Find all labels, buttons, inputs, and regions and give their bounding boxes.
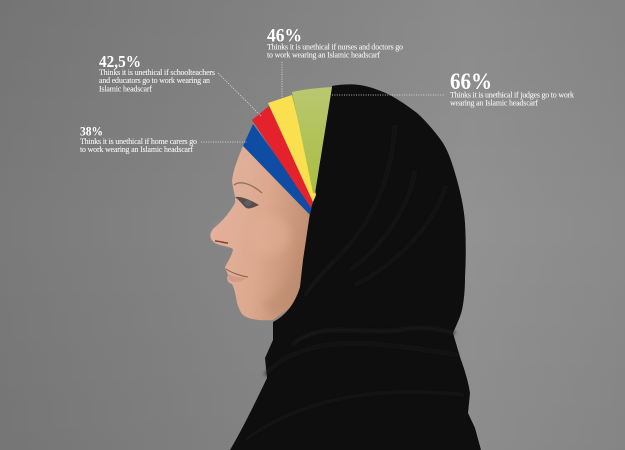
black hijab — [230, 84, 481, 450]
band: blue 38% — [243, 124, 312, 215]
stat: 42,5%: 42,5% — [99, 52, 141, 71]
stat: 38%: 38% — [80, 124, 103, 138]
hijab folds — [245, 125, 465, 440]
brow and eye — [234, 183, 262, 208]
stat: 46%: Thinks it is unethical if nurses and doctors go — [267, 42, 403, 52]
stat: 46% — [267, 26, 403, 60]
band: red 42.5% — [252, 106, 313, 208]
stat: 66% — [450, 69, 574, 108]
stat: 38% — [80, 124, 197, 154]
stat: 42,5% — [99, 52, 215, 94]
stat: 42,5%: Islamic headscarf — [99, 84, 152, 94]
band: green 66% — [292, 87, 332, 193]
stat: 66%: wearing an Islamic headscarf — [450, 98, 538, 108]
leader lines — [201, 62, 445, 142]
stat: 46%: 46% — [267, 26, 302, 46]
stat: 66%: Thinks it is unethical if judges go to work — [450, 90, 574, 100]
face shading — [216, 215, 305, 318]
illustration: woman in profile wearing headscarf — [210, 84, 481, 450]
stat: 42,5%: Thinks it is unethical if schoolteachers — [99, 68, 215, 77]
band: yellow 46% — [268, 95, 316, 202]
stat: 66%: 66% — [450, 69, 492, 94]
stat: 42,5%: and educators go to work wearing an — [99, 76, 210, 85]
face — [210, 146, 320, 320]
stat: 38%: Thinks it is unethical if home carers go — [80, 137, 197, 146]
nostril and mouth — [215, 241, 248, 282]
stat: 38%: to work wearing an Islamic headscarf — [80, 145, 193, 154]
stat: 46%: to work wearing an Islamic headscarf — [267, 50, 380, 60]
